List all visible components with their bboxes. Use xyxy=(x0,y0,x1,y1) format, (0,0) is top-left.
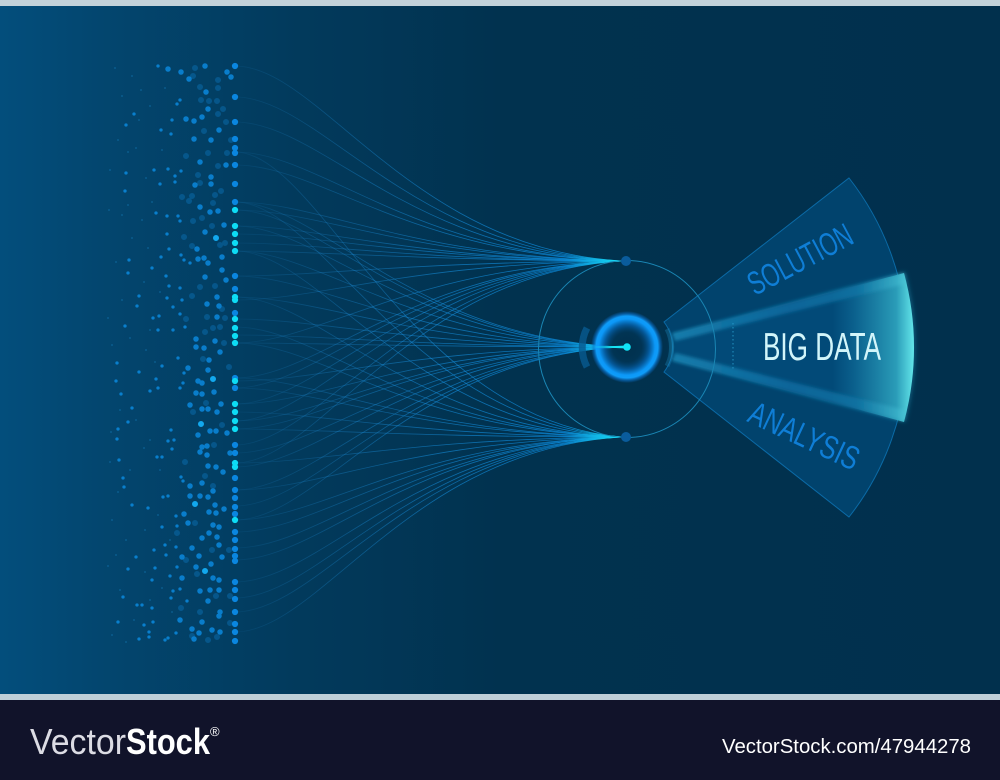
top hub xyxy=(621,256,631,266)
footer logo: Vector xyxy=(30,721,126,762)
bottom hub xyxy=(621,432,631,442)
sector glow xyxy=(672,272,915,422)
label: BIG DATA: BIG DATA xyxy=(763,326,881,369)
blue column points xyxy=(232,66,238,641)
sector label: SOLUTION: SOLUTION xyxy=(741,216,859,302)
big data sector xyxy=(672,272,915,422)
cyan column points xyxy=(232,210,238,520)
top light bar xyxy=(0,0,1000,6)
faint tiny particles xyxy=(108,68,172,642)
glowing core ring xyxy=(591,311,663,383)
curves to centre hub xyxy=(235,202,622,520)
footer logo: ® xyxy=(210,724,220,739)
left arc marker xyxy=(582,328,587,367)
bottom light bar xyxy=(0,694,1000,700)
bright particles xyxy=(195,238,216,571)
flow curves into three hubs xyxy=(235,66,622,632)
sector fill xyxy=(672,273,914,422)
footer logo: Stock xyxy=(126,721,211,762)
footer image id: VectorStock.com/47944278 xyxy=(722,736,971,758)
large dim particles xyxy=(177,68,231,640)
right arc marker xyxy=(667,329,672,366)
sector label: ANALYSIS: ANALYSIS xyxy=(743,394,866,477)
core dot xyxy=(623,343,631,351)
sector top edge band xyxy=(672,273,905,341)
centre fan highlight xyxy=(592,346,627,348)
curves to top hub xyxy=(235,66,622,463)
footer logo xyxy=(30,721,220,762)
tick marks xyxy=(732,323,734,371)
outer fan sector xyxy=(664,178,907,517)
small blue particles xyxy=(116,66,190,640)
medium blue particles xyxy=(168,66,231,639)
sector bottom edge band xyxy=(672,353,905,421)
curves to bottom hub xyxy=(235,152,622,632)
scattered data particles xyxy=(108,66,231,642)
large orbit ring xyxy=(538,260,716,438)
data point column xyxy=(232,66,238,641)
